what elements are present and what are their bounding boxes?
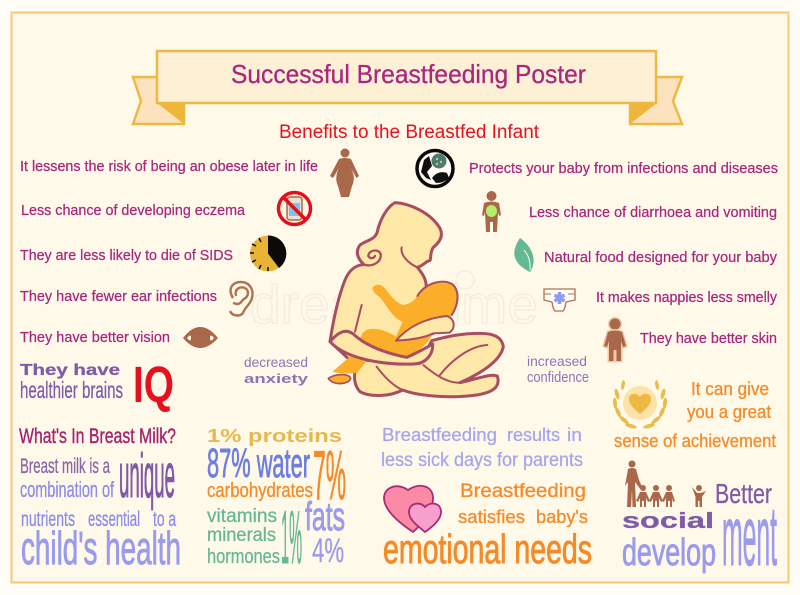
icon: laurel with heart <box>613 380 667 429</box>
title ribbon <box>133 51 682 124</box>
illustration: mother breastfeeding baby <box>328 203 503 397</box>
mother's head and torso <box>330 203 441 363</box>
left benefits list <box>20 158 318 346</box>
text block: unique combination <box>20 442 181 574</box>
text: better social development: develop <box>622 532 716 574</box>
text: decreased anxiety <box>244 354 309 386</box>
text block: unique combination: combination of <box>20 477 115 502</box>
panel: milk composition: 4% <box>312 532 344 570</box>
text: decreased anxiety: decreased <box>244 354 308 370</box>
text: sick days: Breastfeeding <box>382 425 497 445</box>
heading: What's In Breast Milk? <box>19 425 176 448</box>
icon: child with green belly <box>482 191 501 232</box>
panel: milk composition: fats <box>305 495 345 539</box>
text: decreased anxiety: anxiety <box>244 371 309 386</box>
icon: person with healthy skin <box>604 318 626 361</box>
text: increased confidence: confidence <box>527 369 589 386</box>
panel: milk composition: 1% proteins <box>207 426 342 446</box>
text: sense of achievement: It can give <box>691 379 769 399</box>
mother's arm and hand <box>330 331 433 364</box>
text: sense of achievement <box>614 379 776 451</box>
text: emotional needs: emotional needs <box>383 526 592 572</box>
text: better social development: social <box>622 508 714 533</box>
text: emotional needs <box>383 481 592 572</box>
text: emotional needs: Breastfeeding <box>460 481 586 502</box>
baby's head outline <box>417 282 458 315</box>
text: sick days <box>381 425 583 471</box>
left benefits list: They have fewer ear infections <box>20 288 217 305</box>
left benefits list: They are less likely to die of SIDS <box>20 247 233 264</box>
watermark: dreamstime <box>250 275 538 335</box>
text: better social development <box>622 478 777 583</box>
left benefits list: They have better vision <box>20 329 170 346</box>
text: sense of achievement: sense of achievement <box>614 431 776 451</box>
text: increased confidence: increased <box>527 353 587 369</box>
left benefits list: It lessens the risk of being an obese later in life <box>20 158 318 175</box>
panel: milk composition: minerals <box>207 525 276 546</box>
text: increased confidence <box>527 353 589 386</box>
right benefits list: Protects your baby from infections and diseases <box>469 160 778 177</box>
text: unique <box>119 442 175 511</box>
icon: leaf <box>514 238 534 272</box>
right benefits list: It makes nappies less smelly <box>596 289 777 306</box>
panel: what's in breast milk <box>19 425 181 574</box>
icon: hearts <box>384 486 441 532</box>
baby's foot <box>328 375 351 384</box>
text: sense of achievement: you a great <box>687 402 771 422</box>
right benefits list: Less chance of diarrhoea and vomiting <box>529 204 777 221</box>
hair curl <box>364 251 381 265</box>
baby's lower leg <box>333 350 370 374</box>
heading: benefits: Benefits to the Breastfed Infant <box>279 122 540 143</box>
mother's legs <box>354 333 503 397</box>
text: healthier brains: They have <box>20 362 120 379</box>
hair and leg lines <box>355 247 487 390</box>
icon: germs <box>417 150 453 186</box>
icon: obese person <box>330 148 359 197</box>
text: emotional needs: satisfies <box>458 507 525 527</box>
panel: milk composition: vitamins <box>207 506 277 527</box>
icon: eye <box>183 327 218 348</box>
text block: unique combination: Breast milk is a <box>20 455 110 478</box>
right benefits list <box>469 160 778 347</box>
text: sick days: in <box>567 425 582 445</box>
panel: milk composition: carbohydrates <box>207 480 313 502</box>
text block: unique combination: essential <box>88 508 140 531</box>
icon: crossed-out cream <box>278 192 310 224</box>
right benefits list: They have better skin <box>640 330 777 347</box>
text: healthier brains <box>20 362 123 403</box>
text block: unique combination: to a <box>153 508 176 531</box>
text: 7% <box>313 436 346 514</box>
text: emotional needs: baby's <box>536 507 588 527</box>
baby <box>360 282 458 357</box>
text block: unique combination: nutrients <box>21 508 75 531</box>
text: sick days: less sick days for parents <box>381 450 583 471</box>
panel: milk composition: 87% water <box>207 440 310 486</box>
icon: ear <box>230 282 253 315</box>
text: IQ: IQ <box>133 356 174 413</box>
panel: milk composition: 1% <box>281 495 302 579</box>
text: better social development: Better <box>715 478 772 509</box>
panel: milk composition <box>207 426 346 579</box>
panel: milk composition: hormones <box>207 546 280 568</box>
text: sick days: results <box>507 425 560 445</box>
right benefits list: Natural food designed for your baby <box>544 249 777 266</box>
text block: unique combination: child's health <box>21 522 181 574</box>
text: healthier brains: healthier brains <box>20 377 123 403</box>
icon: clock <box>250 235 286 272</box>
icon: family <box>625 460 706 507</box>
left benefits list: Less chance of developing eczema <box>21 202 246 219</box>
icon: nappy <box>544 289 575 311</box>
title: Successful Breastfeeding Poster <box>231 59 586 89</box>
